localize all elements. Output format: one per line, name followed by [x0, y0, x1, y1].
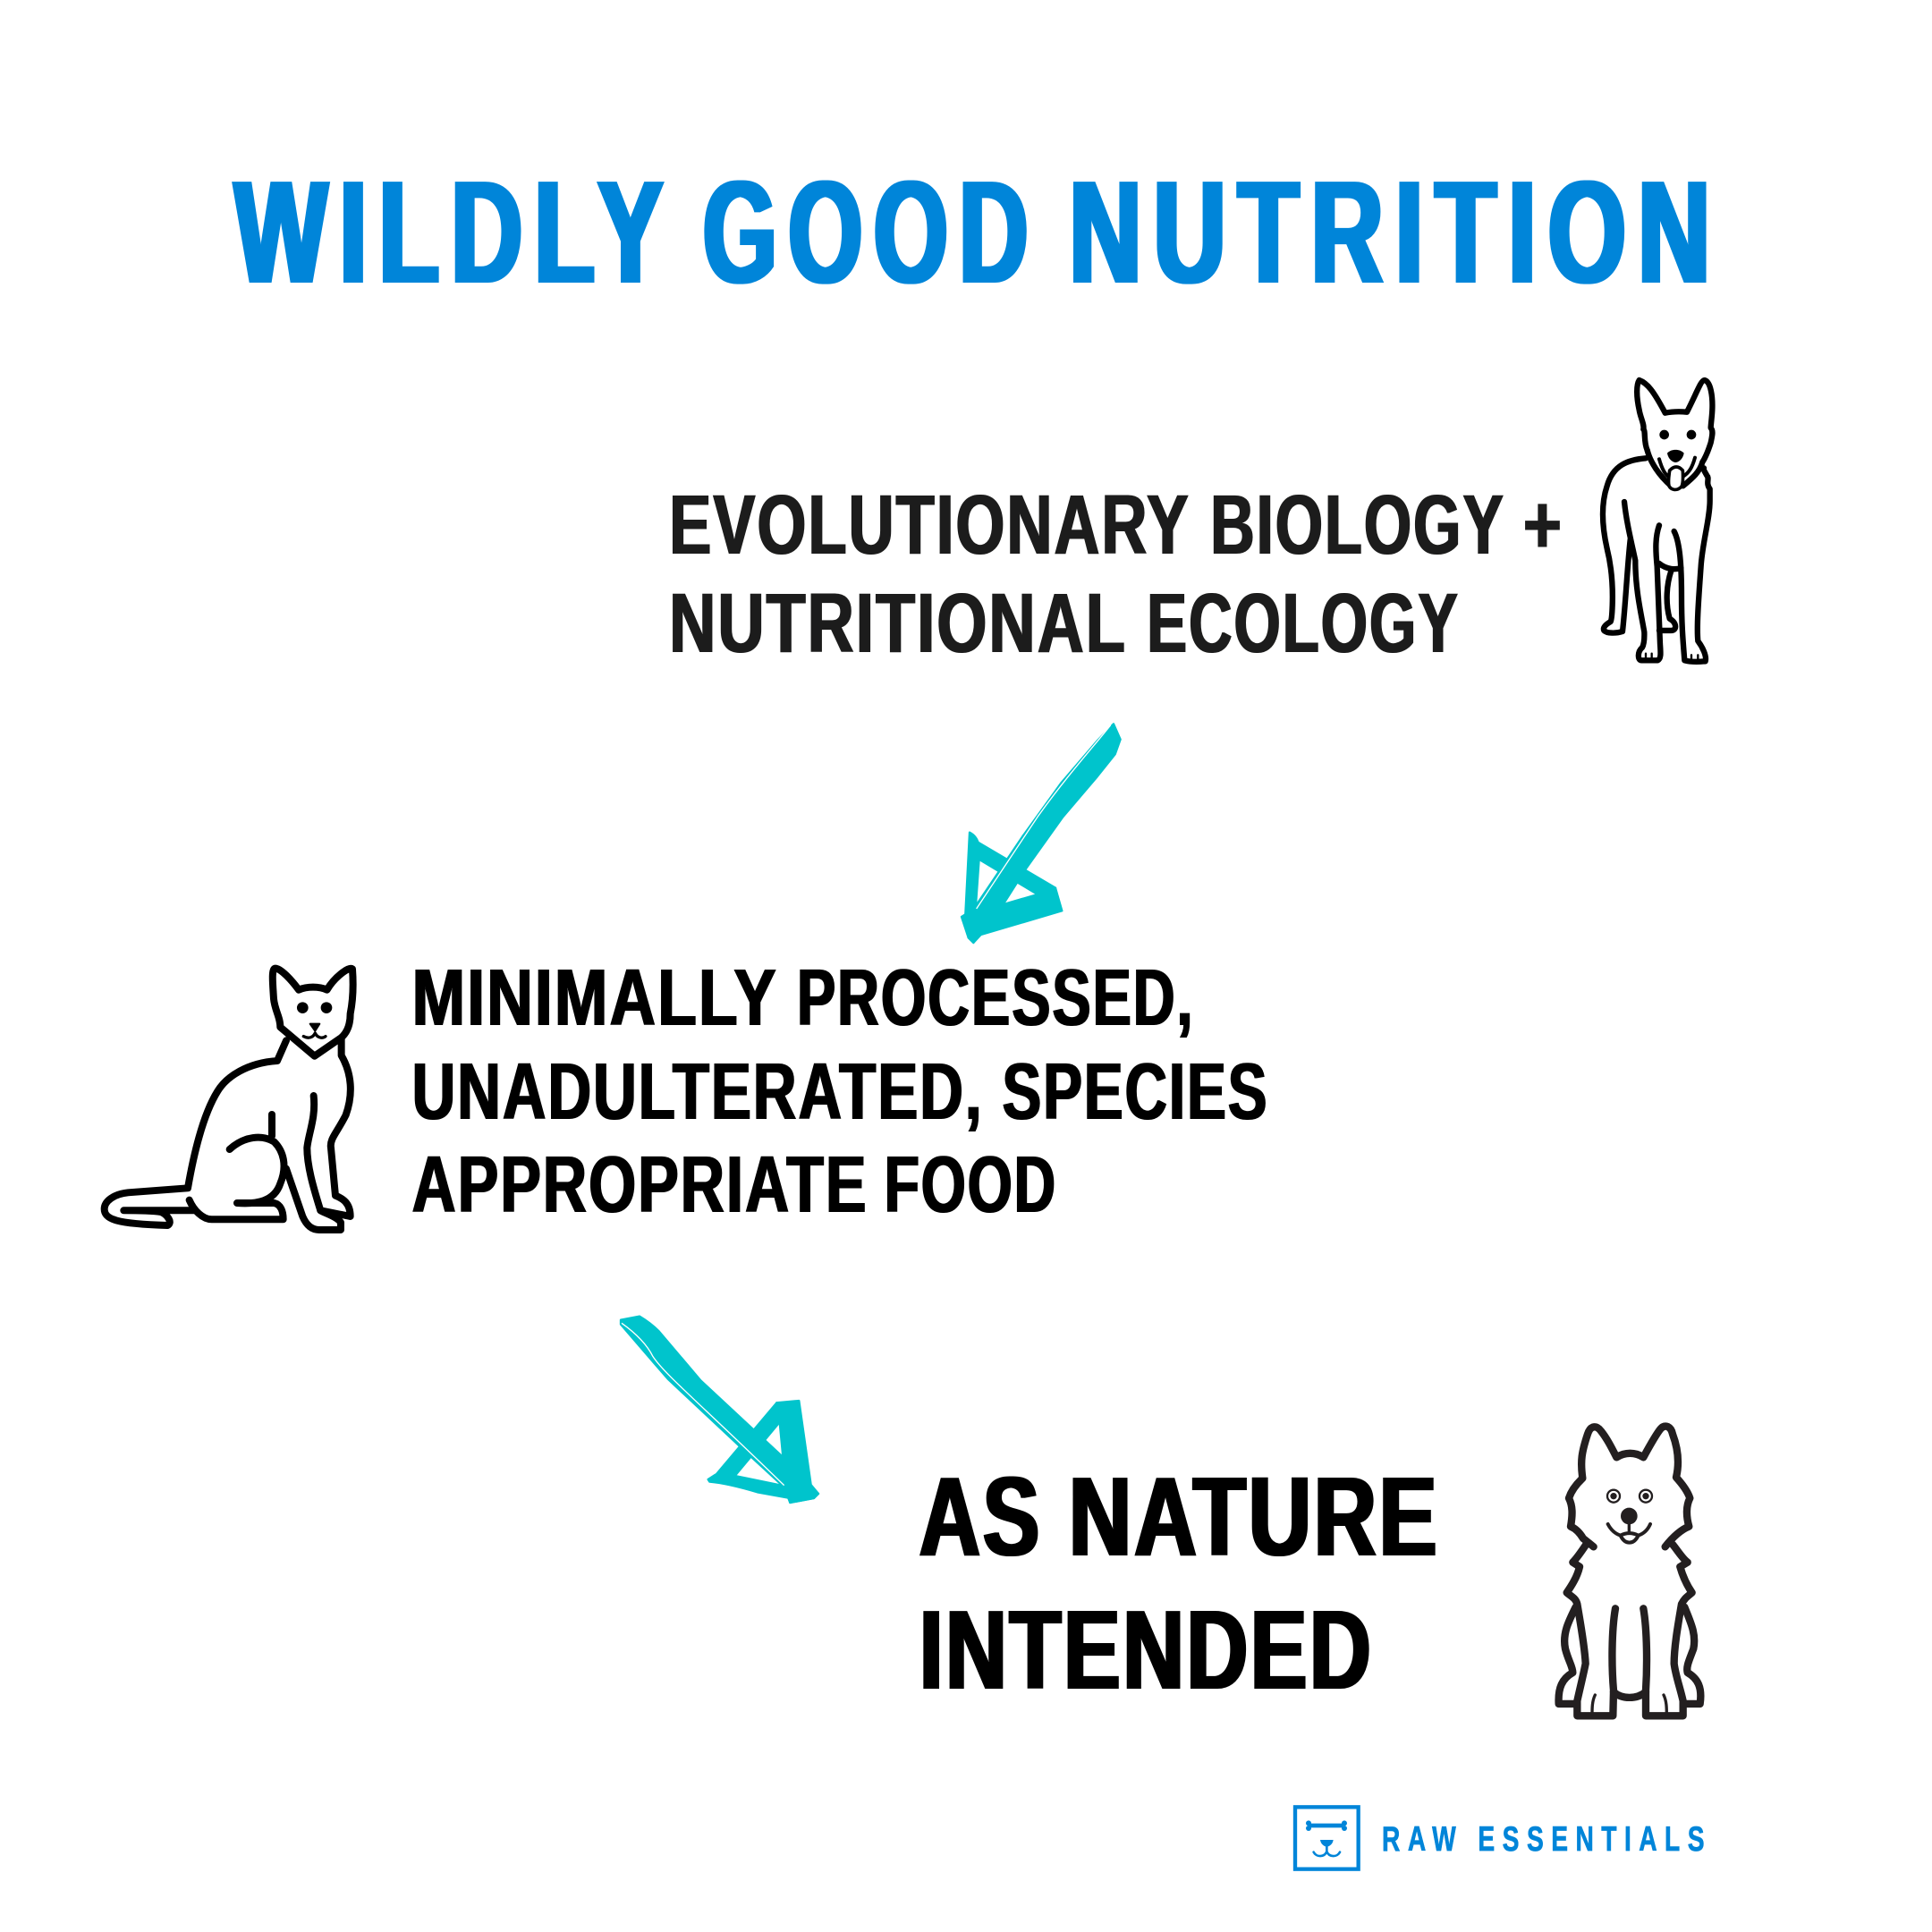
text block: evolutionary biology: + — [1523, 478, 1563, 572]
icon: standing dog — [1603, 380, 1712, 662]
text block: evolutionary biology: BIOLOGY — [1210, 478, 1505, 572]
text block: minimally processed: APPROPRIATE — [411, 1140, 868, 1230]
text block: as nature intended: AS — [919, 1453, 1042, 1580]
text block: minimally processed: UNADULTERATED, — [412, 1047, 984, 1137]
title: WILDLY — [234, 150, 675, 314]
logo mark: bone and snout — [1295, 1807, 1359, 1869]
text block: minimally processed: SPECIES — [1002, 1047, 1268, 1137]
text block: minimally processed: FOOD — [885, 1140, 1057, 1230]
text block: as nature intended: NATURE — [1069, 1453, 1439, 1580]
arrow: down-right — [621, 1317, 818, 1503]
text block: minimally processed: PROCESSED, — [797, 953, 1195, 1043]
icon: sitting cat — [105, 969, 353, 1230]
title: GOOD — [703, 150, 1039, 314]
text block: as nature intended: INTENDED — [919, 1586, 1373, 1713]
text block: evolutionary biology: EVOLUTIONARY — [669, 478, 1191, 572]
text block: as nature intended — [919, 1453, 1439, 1713]
logo wordmark: RAW ESSENTIALS — [1382, 1820, 1712, 1859]
title — [234, 150, 1723, 314]
text block: evolutionary biology — [669, 478, 1563, 671]
text block: evolutionary biology: NUTRITIONAL — [669, 576, 1127, 671]
text block: evolutionary biology: ECOLOGY — [1147, 576, 1460, 671]
text block: minimally processed: MINIMALLY — [412, 953, 778, 1043]
text block: minimally processed — [411, 953, 1268, 1230]
logo: raw essentials — [1295, 1807, 1712, 1869]
icon: sitting fluffy dog — [1559, 1427, 1700, 1716]
arrow: down-left — [962, 724, 1121, 943]
